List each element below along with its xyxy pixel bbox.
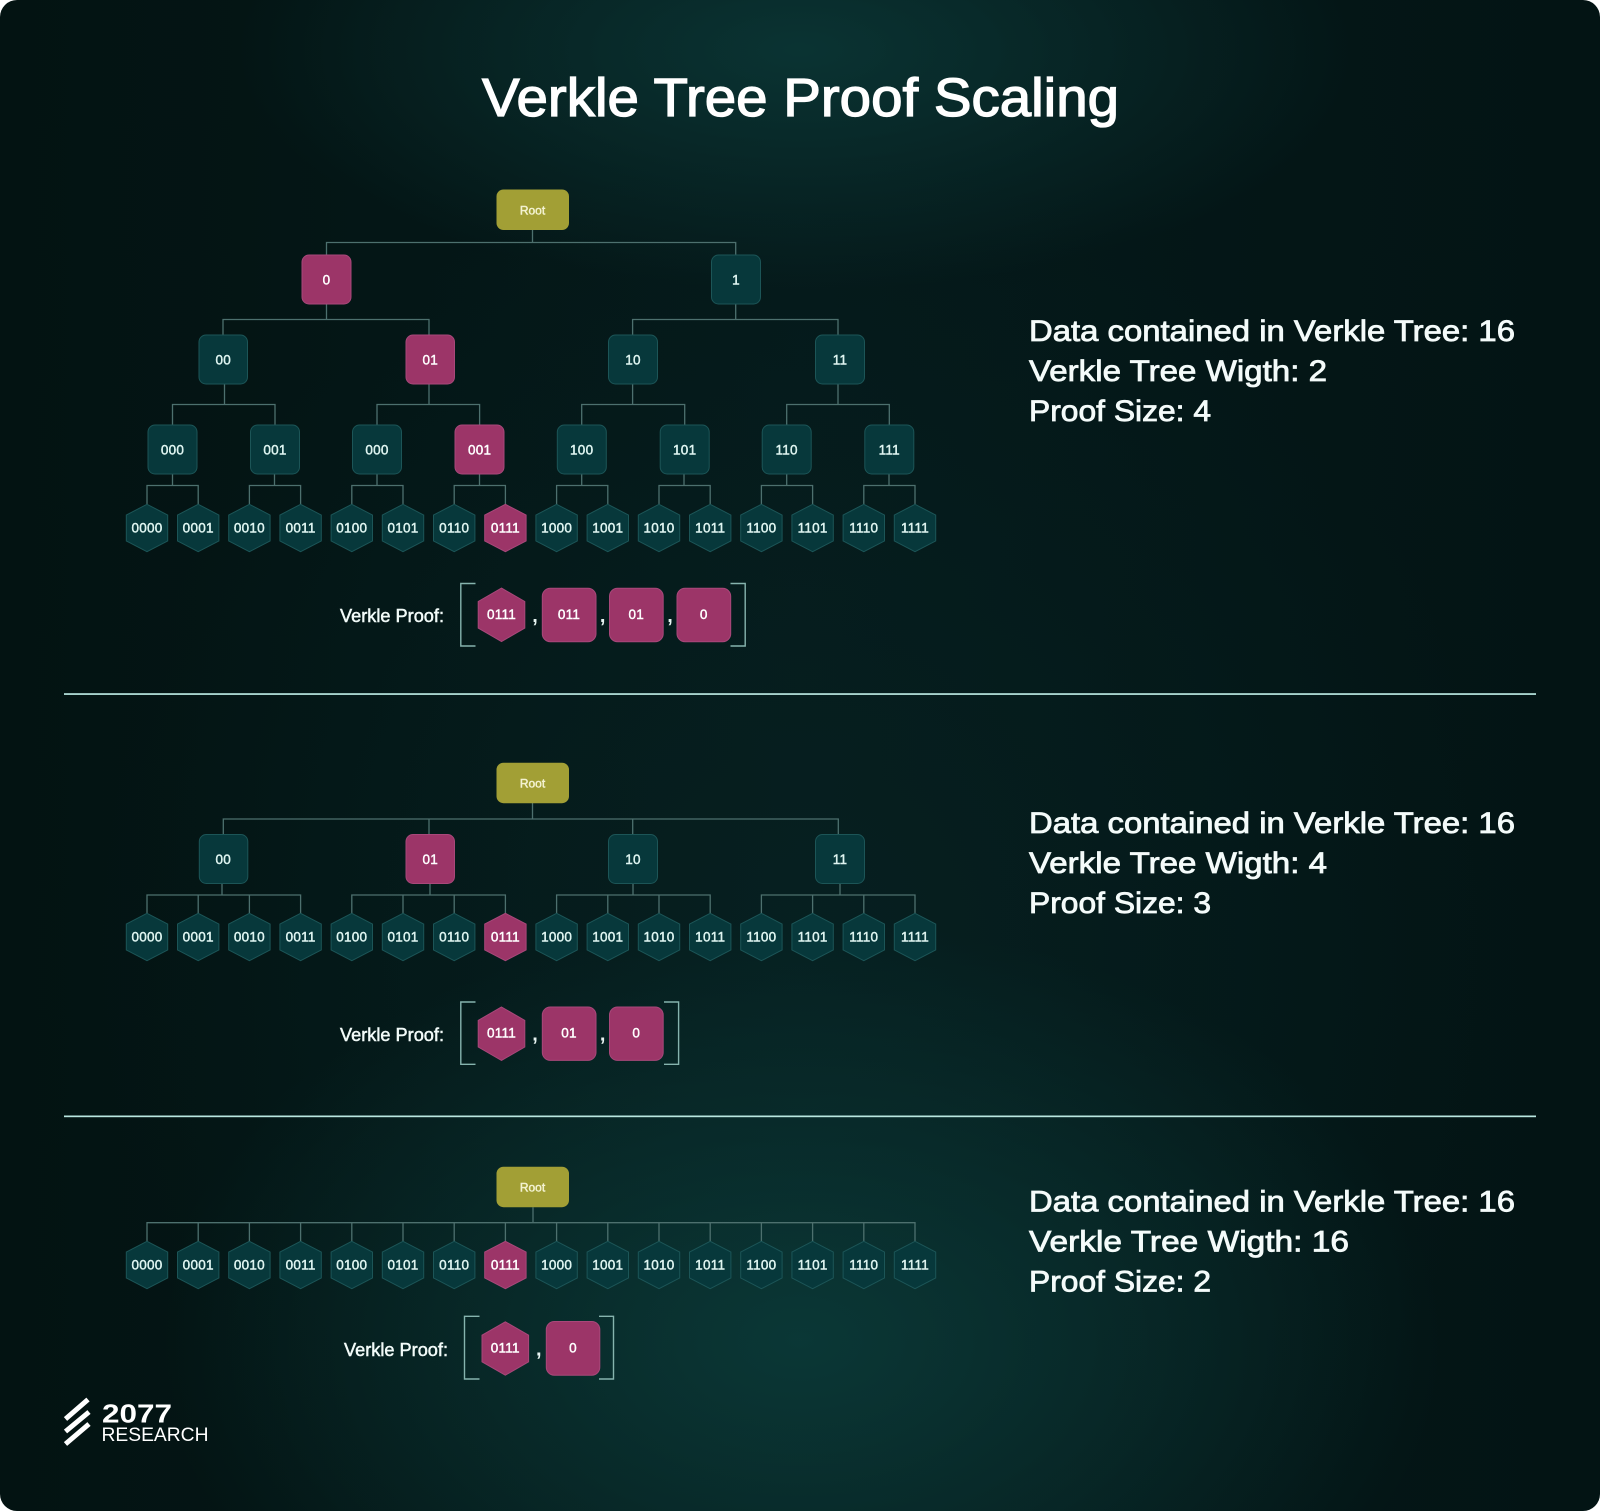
leaf row: hexagons: 0000	[131, 521, 163, 536]
node 00	[199, 834, 248, 884]
panel: width 2 tree	[126, 190, 936, 552]
comma: ,	[532, 605, 538, 627]
divider 1	[64, 693, 1536, 695]
leaf row: hexagons: 0010	[234, 930, 265, 945]
comma: ,	[667, 605, 673, 627]
leaf row: hexagons: 1110	[849, 1258, 878, 1273]
leaf row: hexagons: 0100	[336, 521, 367, 536]
proof label: Verkle Proof:	[344, 1340, 448, 1360]
proof box 011	[542, 588, 596, 642]
node 1: 1	[732, 272, 740, 288]
leaf row: hexagons	[126, 1241, 936, 1289]
proof hexagon 0111	[482, 1322, 529, 1375]
node 111: 111	[879, 442, 900, 458]
comma: ,	[532, 1024, 538, 1046]
leaf row: hexagons: 0111	[491, 1258, 520, 1273]
leaf row: hexagons: 0100	[336, 1258, 367, 1273]
leaf row: hexagons: 0110	[439, 1258, 469, 1273]
leaf row: hexagons: 1010	[643, 930, 675, 945]
node 0: 0	[323, 272, 330, 288]
leaf row: hexagons: 0011	[286, 521, 316, 536]
leaf row: hexagons: 0010	[234, 1258, 265, 1273]
leaf row: hexagons: 1010	[643, 1258, 675, 1273]
node 1	[712, 255, 760, 304]
proof label: Verkle Proof:	[340, 606, 444, 626]
node 01: 01	[423, 852, 438, 867]
node 110	[762, 425, 811, 474]
proof box 0: 0	[700, 607, 708, 622]
stats: width 2: Proof Size: 4	[1029, 395, 1211, 428]
proof box 01: 01	[629, 607, 644, 622]
proof hexagon 0111: 0111	[487, 1025, 516, 1040]
node 10: 10	[625, 352, 641, 368]
proof box 011: 011	[558, 607, 580, 622]
comma: ,	[600, 1024, 605, 1046]
leaf row: hexagons: 0011	[286, 930, 316, 945]
stats: width 4	[1029, 807, 1515, 920]
node 100: 100	[570, 442, 593, 458]
root node	[496, 190, 569, 230]
proof label: Verkle Proof:	[340, 1025, 444, 1045]
proof hexagon 0111	[478, 588, 525, 642]
leaf row: hexagons: 0101	[387, 930, 419, 945]
node 11	[816, 335, 864, 384]
connectors: width 4 tree	[147, 803, 915, 913]
proof row: width 2	[340, 584, 745, 646]
node 01	[406, 834, 454, 884]
stats: width 4: Proof Size: 3	[1029, 887, 1211, 920]
proof box 0: 0	[569, 1340, 577, 1356]
node 0	[302, 255, 351, 304]
leaf row: hexagons: 0010	[234, 521, 265, 536]
node 00: 00	[216, 352, 231, 368]
comma: ,	[536, 1338, 542, 1360]
leaf row: hexagons: 1001	[592, 521, 623, 536]
leaf row: hexagons: 1111	[901, 1258, 929, 1273]
leaf row: hexagons: 0111	[491, 521, 520, 536]
leaf row: hexagons: 0001	[183, 1258, 214, 1273]
node 10	[608, 834, 658, 884]
leaf row: hexagons: 0011	[286, 1258, 316, 1273]
root node: Root	[520, 1180, 546, 1194]
node 001	[250, 425, 300, 474]
stats: width 2: Verkle Tree Wigth: 2	[1029, 355, 1327, 388]
node 110: 110	[776, 442, 798, 458]
leaf row: hexagons: 1110	[849, 930, 878, 945]
leaf row: hexagons: 0001	[183, 930, 214, 945]
node 100	[557, 425, 606, 474]
connectors: width 2 tree	[147, 230, 915, 504]
stats: width 16: Verkle Tree Wigth: 16	[1029, 1225, 1349, 1258]
leaf row: hexagons: 1100	[746, 930, 776, 945]
node 01: 01	[423, 352, 438, 368]
proof hexagon 0111: 0111	[487, 607, 516, 622]
icon: logo stripes	[66, 1400, 89, 1444]
leaf row: hexagons: 1100	[746, 521, 776, 536]
root node: Root	[520, 776, 546, 790]
node 000 second	[352, 425, 402, 474]
comma: ,	[600, 605, 605, 627]
stats: width 4: Data contained in Verkle Tree: 16	[1029, 807, 1515, 840]
leaf row: hexagons: 0000	[131, 930, 163, 945]
leaf row: hexagons: 1001	[592, 1258, 623, 1273]
node 10: 10	[625, 852, 641, 867]
leaf row: hexagons: 0101	[387, 521, 419, 536]
leaf row: hexagons: 1000	[541, 521, 572, 536]
proof hexagon 0111: 0111	[491, 1340, 520, 1355]
connectors: width 16 tree	[147, 1207, 915, 1242]
root node: Root	[520, 204, 546, 218]
node 000: 000	[161, 442, 184, 458]
stats: width 2: Data contained in Verkle Tree: 16	[1029, 315, 1515, 348]
leaf row: hexagons: 1011	[695, 521, 725, 536]
root node	[496, 1167, 569, 1207]
leaf row: hexagons: 1100	[746, 1258, 776, 1273]
stats: width 16: Data contained in Verkle Tree: 16	[1029, 1185, 1515, 1218]
node 000 second: 000	[365, 442, 389, 458]
divider 2	[64, 1116, 1536, 1117]
logo subtitle: RESEARCH	[102, 1425, 208, 1446]
node 00: 00	[216, 852, 231, 867]
proof box 0	[677, 588, 731, 642]
proof row: width 4	[340, 1002, 679, 1064]
node 101: 101	[673, 442, 696, 458]
leaf row: hexagons: 0001	[183, 521, 214, 536]
leaf row: hexagons: 1010	[643, 521, 675, 536]
leaf row: hexagons	[126, 913, 936, 961]
proof box 01	[610, 588, 663, 642]
leaf row: hexagons: 1011	[695, 1258, 725, 1273]
leaf row: hexagons: 0000	[131, 1258, 163, 1273]
leaf row: hexagons: 0100	[336, 930, 367, 945]
leaf row: hexagons: 1110	[849, 521, 878, 536]
stats: width 16	[1029, 1185, 1515, 1298]
proof box 0	[546, 1322, 600, 1375]
panel: width 16 tree	[126, 1167, 936, 1289]
leaf row: hexagons: 1101	[798, 930, 828, 945]
node 001 highlighted	[455, 425, 504, 474]
brackets	[464, 1316, 614, 1379]
leaf row: hexagons: 1000	[541, 1258, 572, 1273]
leaf row: hexagons: 0111	[491, 930, 520, 945]
node 00	[199, 335, 248, 384]
stats: width 2	[1029, 315, 1515, 428]
leaf row: hexagons: 1011	[695, 930, 725, 945]
proof row: width 16	[344, 1316, 614, 1379]
panel: width 4 tree	[126, 763, 936, 961]
title: Verkle Tree Proof Scaling	[482, 68, 1119, 128]
leaf row: hexagons: 1111	[901, 930, 929, 945]
proof box 0: 0	[632, 1026, 640, 1040]
proof box 01: 01	[561, 1026, 577, 1040]
node 11: 11	[833, 352, 847, 368]
brackets	[461, 1002, 679, 1064]
node 001 highlighted: 001	[468, 442, 491, 458]
leaf row: hexagons: 0110	[439, 930, 469, 945]
leaf row: hexagons: 1111	[901, 521, 929, 536]
node 01	[406, 335, 454, 384]
logo: 2077 Research	[66, 1398, 208, 1446]
proof box 01	[542, 1007, 596, 1060]
leaf row: hexagons: 0110	[439, 521, 469, 536]
brackets	[461, 584, 745, 646]
stats: width 4: Verkle Tree Wigth: 4	[1029, 847, 1327, 880]
node 000	[148, 425, 197, 474]
node 11	[816, 834, 864, 884]
leaf row: hexagons: 1001	[592, 930, 623, 945]
logo wordmark: 2077	[102, 1398, 172, 1428]
leaf row: hexagons: 1000	[541, 930, 572, 945]
node 10	[608, 335, 658, 384]
root node	[496, 763, 569, 803]
node 101	[660, 425, 709, 474]
node 111	[865, 425, 914, 474]
proof box 0	[610, 1007, 663, 1060]
proof hexagon 0111	[478, 1007, 525, 1060]
stats: width 16: Proof Size: 2	[1029, 1266, 1211, 1298]
node 001: 001	[263, 442, 287, 458]
leaf row: hexagons	[126, 504, 936, 552]
node 11: 11	[833, 852, 847, 867]
leaf row: hexagons: 0101	[387, 1258, 419, 1273]
leaf row: hexagons: 1101	[798, 521, 828, 536]
leaf row: hexagons: 1101	[798, 1258, 828, 1273]
